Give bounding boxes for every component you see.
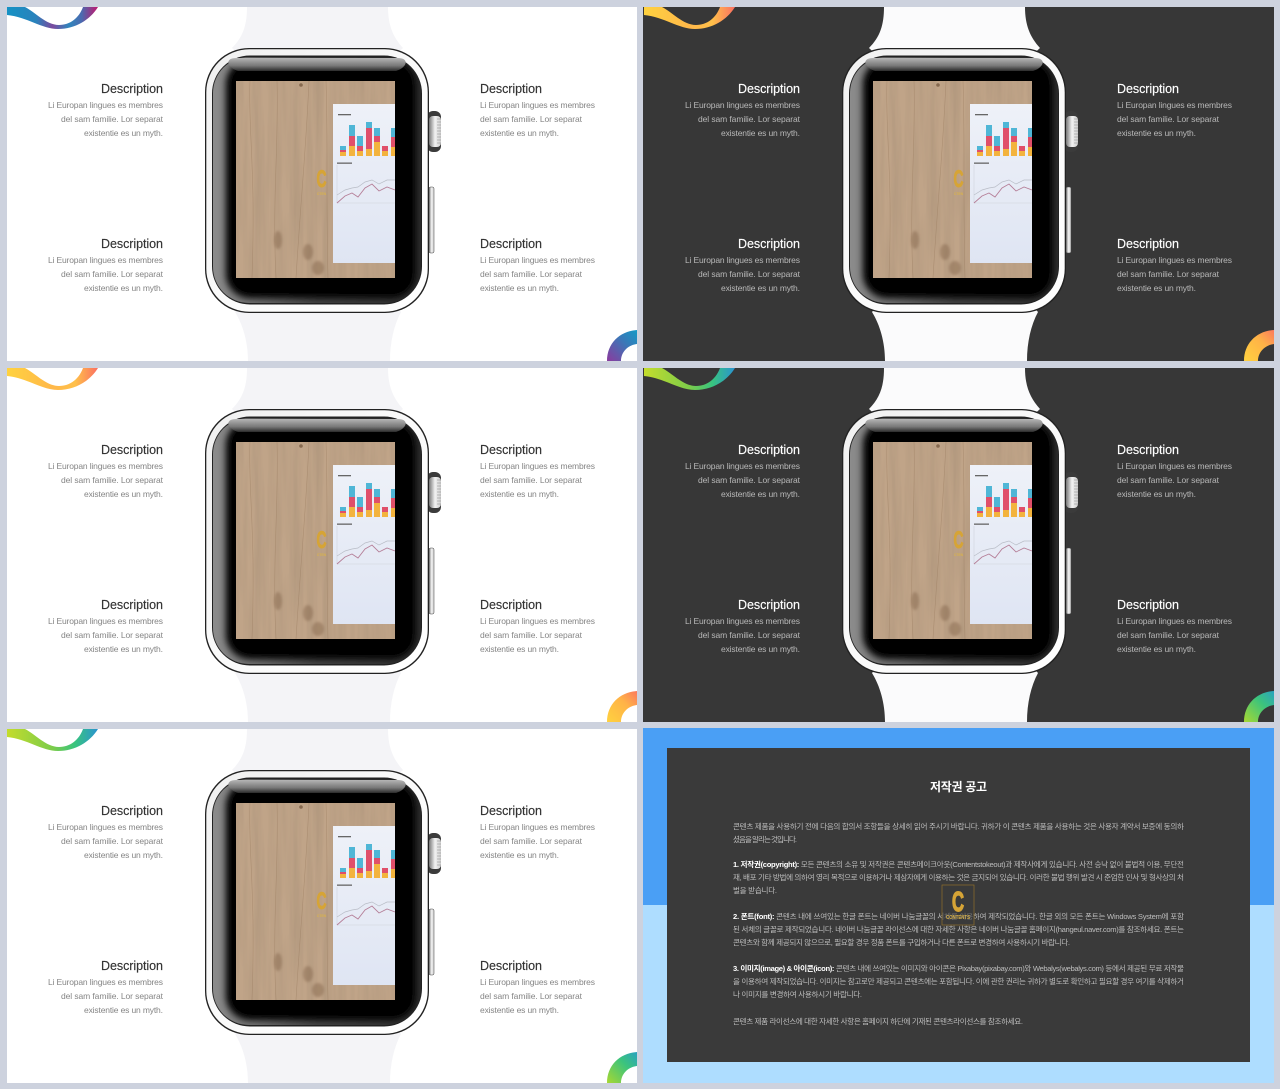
intro paragraph: 셨음을 알리는 것입니다. [733, 834, 797, 844]
light blue background bottom [643, 905, 1274, 1083]
logo watermark: CTEN [317, 913, 326, 918]
ribbon top-left [644, 368, 735, 390]
text block top-left [685, 82, 801, 138]
text block top-left: Li Europan lingues es membres [48, 822, 163, 832]
watch [205, 48, 441, 313]
text block top-left: Li Europan lingues es membres [48, 461, 163, 471]
text block top-right: Description [1117, 82, 1179, 96]
text block top-right: existentie es un myth. [480, 850, 559, 860]
text block bottom-left: Li Europan lingues es membres [48, 616, 163, 626]
text block bottom-left [685, 598, 801, 654]
text block top-right: Li Europan lingues es membres [1117, 100, 1232, 110]
text block bottom-right: del sam familie. Lor separat [480, 991, 583, 1001]
slide 2: dark with yellow ribbon [643, 7, 1274, 361]
ribbon corner bottom-right [1244, 330, 1274, 361]
text block bottom-left: existentie es un myth. [84, 1005, 163, 1015]
text block bottom-right [480, 237, 595, 293]
watch [205, 770, 441, 1035]
text block bottom-left: Description [101, 237, 163, 251]
text block bottom-left: existentie es un myth. [84, 644, 163, 654]
text block bottom-left: Li Europan lingues es membres [685, 616, 800, 626]
paragraph 3: image and icon: 을 이용하여 제작되었습니다. 이미지는 참고로만 제공되고 콘텐츠에는 포함됩니다. 이에 관한 권리는 귀하가 별도로 확인하고 필요할 경우 여기를 삭제하거 [733, 976, 1184, 986]
blue background top [643, 728, 1274, 905]
text block bottom-right: existentie es un myth. [480, 1005, 559, 1015]
text block top-left: Description [101, 82, 163, 96]
slide 1: white with blue ribbon [7, 7, 637, 361]
watch strap [232, 368, 403, 722]
slide background [7, 368, 637, 722]
watch strap [869, 7, 1040, 361]
slide background [643, 368, 1274, 722]
intro paragraph [733, 821, 1184, 844]
text block top-right: del sam familie. Lor separat [480, 114, 583, 124]
text block top-right: Li Europan lingues es membres [480, 822, 595, 832]
paragraph 2: font: 된 서체의 글꼴로 제작되었습니다. 네이버 나눔글꼴 라이선스에 대한 자세한 사항은 네이버 나눔글꼴 홈페이지(hangeul.naver.com)를 참조하세요. 폰트는 [733, 924, 1184, 934]
text block bottom-left: Li Europan lingues es membres [685, 255, 800, 265]
text block top-right [1117, 443, 1232, 499]
text block top-left [48, 804, 164, 860]
text block top-left: Description [738, 443, 800, 457]
ribbon top-left [7, 368, 98, 390]
watch strap [869, 368, 1040, 722]
text block bottom-right: del sam familie. Lor separat [1117, 630, 1220, 640]
text block top-right: del sam familie. Lor separat [480, 475, 583, 485]
slide 5: white with green ribbon [7, 729, 637, 1083]
text block bottom-right: existentie es un myth. [1117, 644, 1196, 654]
text block top-left: del sam familie. Lor separat [61, 836, 164, 846]
text block top-left: Description [101, 443, 163, 457]
paragraph 1: copyright: 재, 배포 기타 방법에 의하여 영리 목적으로 이용하거나 제삼자에게 이용하는 것은 금지되어 있습니다. 이러한 불법 행위 발견 시 준엄한 민사 및 형사상의 처 [733, 872, 1184, 882]
text block bottom-right: Li Europan lingues es membres [1117, 255, 1232, 265]
text block bottom-left: Description [101, 959, 163, 973]
text block bottom-right [1117, 237, 1232, 293]
text block bottom-right: Li Europan lingues es membres [480, 255, 595, 265]
text block top-right: Li Europan lingues es membres [480, 100, 595, 110]
logo watermark: C [316, 888, 326, 915]
ribbon top-left [7, 729, 98, 751]
ribbon top-left [644, 7, 735, 29]
text block bottom-left: existentie es un myth. [721, 283, 800, 293]
text block bottom-left: Li Europan lingues es membres [48, 255, 163, 265]
logo watermark: CTEN [317, 191, 326, 196]
text block bottom-right: Li Europan lingues es membres [480, 616, 595, 626]
paragraph 1: copyright: 벌을 받습니다. [733, 885, 777, 895]
text block top-right [480, 443, 595, 499]
text block bottom-right: Li Europan lingues es membres [480, 977, 595, 987]
ribbon corner bottom-right [607, 691, 637, 722]
text block top-right: existentie es un myth. [1117, 128, 1196, 138]
text block bottom-right: del sam familie. Lor separat [480, 630, 583, 640]
text block top-right: existentie es un myth. [480, 489, 559, 499]
text block top-left [48, 82, 164, 138]
text block top-right: existentie es un myth. [480, 128, 559, 138]
text block bottom-right: existentie es un myth. [480, 644, 559, 654]
text block top-right: Description [480, 804, 542, 818]
logo watermark [316, 888, 326, 918]
text block bottom-left: Li Europan lingues es membres [48, 977, 163, 987]
notice title: 저작권 공고 [930, 779, 987, 794]
text block top-left: del sam familie. Lor separat [698, 114, 801, 124]
text block top-right: Li Europan lingues es membres [1117, 461, 1232, 471]
ribbon corner bottom-right [1244, 691, 1274, 722]
text block top-right [480, 804, 595, 860]
closing line: 콘텐츠 제품 라이선스에 대한 자세한 사항은 홈페이지 하단에 기재된 콘텐츠라이선스를 참조하세요. [733, 1016, 1023, 1026]
logo watermark [942, 885, 974, 925]
text block top-right: del sam familie. Lor separat [1117, 114, 1220, 124]
text block bottom-right: Description [1117, 598, 1179, 612]
text block bottom-right: existentie es un myth. [1117, 283, 1196, 293]
text block bottom-left [48, 959, 164, 1015]
logo watermark [954, 166, 964, 196]
text block top-left: del sam familie. Lor separat [698, 475, 801, 485]
paragraph 3: image and icon: 3. 이미지(image) & 아이콘(icon): 콘텐츠 내에 쓰여있는 이미지와 아이콘은 Pixabay(pixabay.com)와 Webalys(webalys.com) 등에서 제공된 무료 저작물 [733, 963, 1184, 973]
watch [205, 409, 441, 674]
ribbon corner bottom-right [607, 1052, 637, 1083]
text block top-left: del sam familie. Lor separat [61, 114, 164, 124]
text block bottom-left: existentie es un myth. [84, 283, 163, 293]
text block top-left: existentie es un myth. [84, 850, 163, 860]
logo watermark: CTEN [954, 191, 963, 196]
text block top-left [48, 443, 164, 499]
text block top-left: existentie es un myth. [721, 128, 800, 138]
paragraph 2: font: 콘텐츠와 함께 제공되지 않으므로, 필요할 경우 정품 폰트를 구입하거나 다른 폰트로 변경하여 사용하시기 바랍니다. [733, 937, 1070, 947]
paragraph 1: copyright: 1. 저작권(copyright): 모든 콘텐츠의 소유 및 저작권은 콘텐츠메이크아웃(Contentstokeout)과 제작사에게 있습니다. 사전 승낙 없이 불법적 이용, 무단전 [733, 859, 1184, 869]
text block bottom-right: Description [1117, 237, 1179, 251]
text block bottom-right: Description [480, 237, 542, 251]
logo watermark: C [316, 166, 326, 193]
text block top-left: Li Europan lingues es membres [48, 100, 163, 110]
text block bottom-left: del sam familie. Lor separat [61, 630, 164, 640]
ribbon top-left [7, 7, 98, 29]
text block top-left: Description [101, 804, 163, 818]
text block top-left: existentie es un myth. [721, 489, 800, 499]
text block bottom-right: existentie es un myth. [480, 283, 559, 293]
slide 4: dark with green ribbon [643, 368, 1274, 722]
paragraph 3: image and icon [733, 963, 1184, 999]
text block top-left: del sam familie. Lor separat [61, 475, 164, 485]
text block top-right: Description [480, 443, 542, 457]
text block bottom-left: del sam familie. Lor separat [61, 269, 164, 279]
logo watermark: C [954, 527, 964, 554]
text block bottom-left: del sam familie. Lor separat [698, 269, 801, 279]
logo watermark: CTEN [317, 552, 326, 557]
text block top-left: existentie es un myth. [84, 489, 163, 499]
text block top-right [480, 82, 595, 138]
watch strap [232, 7, 403, 361]
text block bottom-left: existentie es un myth. [721, 644, 800, 654]
text block top-left [685, 443, 801, 499]
slide background [643, 7, 1274, 361]
slide background [7, 729, 637, 1083]
text block top-left: Li Europan lingues es membres [685, 461, 800, 471]
logo watermark [316, 166, 326, 196]
text block top-right: Description [1117, 443, 1179, 457]
slide 6: copyright notice [643, 728, 1274, 1083]
watch strap [232, 729, 403, 1083]
text block bottom-left [685, 237, 801, 293]
logo watermark: CONTENTS [946, 915, 970, 921]
text block top-right: existentie es un myth. [1117, 489, 1196, 499]
text block bottom-right: Description [480, 598, 542, 612]
text block bottom-right [480, 598, 595, 654]
watch [842, 48, 1078, 313]
text block bottom-right [480, 959, 595, 1015]
logo watermark [316, 527, 326, 557]
text block top-right: del sam familie. Lor separat [1117, 475, 1220, 485]
text block bottom-right: del sam familie. Lor separat [480, 269, 583, 279]
text block bottom-left: Description [738, 237, 800, 251]
text block bottom-left [48, 237, 164, 293]
logo watermark: CTEN [954, 552, 963, 557]
slide background [7, 7, 637, 361]
text block bottom-left: Description [101, 598, 163, 612]
text block bottom-left: del sam familie. Lor separat [698, 630, 801, 640]
intro paragraph: 콘텐츠 제품을 사용하기 전에 다음의 합의서 조항들을 상세히 읽어 주시기 바랍니다. 귀하가 이 콘텐츠 제품을 사용하는 것은 사용자 계약서 보증에 동의하 [733, 821, 1184, 831]
text block bottom-right [1117, 598, 1232, 654]
text block top-left: Li Europan lingues es membres [685, 100, 800, 110]
text block bottom-left [48, 598, 164, 654]
logo watermark: C [316, 527, 326, 554]
logo watermark: C [952, 886, 964, 917]
text block bottom-right: del sam familie. Lor separat [1117, 269, 1220, 279]
text block top-right: del sam familie. Lor separat [480, 836, 583, 846]
text block top-right [1117, 82, 1232, 138]
text block top-right: Li Europan lingues es membres [480, 461, 595, 471]
paragraph 1: copyright [733, 859, 1184, 895]
text block top-left: Description [738, 82, 800, 96]
text block bottom-right: Description [480, 959, 542, 973]
logo watermark: C [954, 166, 964, 193]
dark notice panel [667, 748, 1250, 1062]
text block bottom-left: Description [738, 598, 800, 612]
text block bottom-left: del sam familie. Lor separat [61, 991, 164, 1001]
watch [842, 409, 1078, 674]
text block bottom-right: Li Europan lingues es membres [1117, 616, 1232, 626]
ribbon corner bottom-right [607, 330, 637, 361]
text block top-left: existentie es un myth. [84, 128, 163, 138]
paragraph 2: font: 2. 폰트(font): 콘텐츠 내에 쓰여있는 한글 폰트는 네이버 나눔글꼴의 서체를 이용하여 제작되었습니다. 한글 외의 모든 폰트는 Windows System에 포함 [733, 911, 1184, 921]
slide 3: white with yellow ribbon [7, 368, 637, 722]
text block top-right: Description [480, 82, 542, 96]
paragraph 3: image and icon: 나 이미지를 변경하여 사용하시기 바랍니다. [733, 989, 862, 999]
logo watermark [954, 527, 964, 557]
paragraph 2: font [733, 911, 1184, 947]
